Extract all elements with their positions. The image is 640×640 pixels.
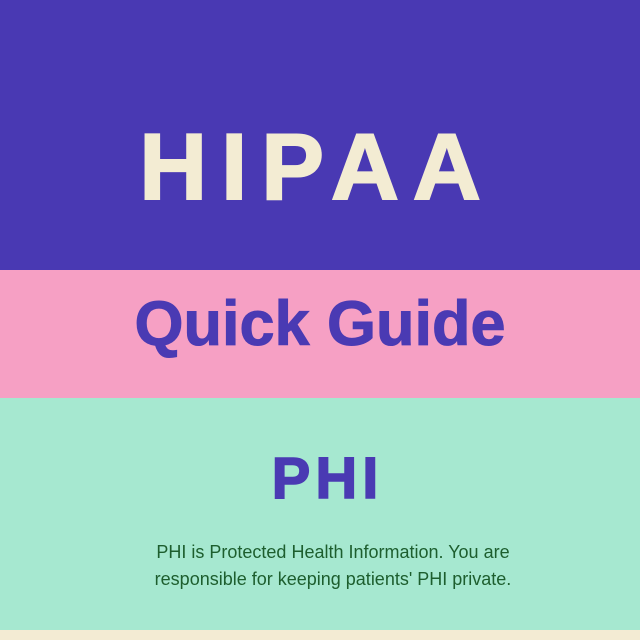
panel: bottom strip bbox=[0, 630, 640, 640]
panel: PHI section bbox=[0, 398, 640, 630]
heading: PHI: PHI bbox=[272, 446, 383, 511]
title: HIPAA: HIPAA bbox=[139, 114, 495, 219]
panel: title band bbox=[0, 0, 640, 270]
panel: subtitle band bbox=[0, 270, 640, 398]
text block: PHI definition: PHI is Protected Health Information. You are responsible for keeping patients' PHI private. bbox=[155, 542, 511, 589]
subtitle: Quick Guide: Quick Guide bbox=[134, 289, 506, 359]
